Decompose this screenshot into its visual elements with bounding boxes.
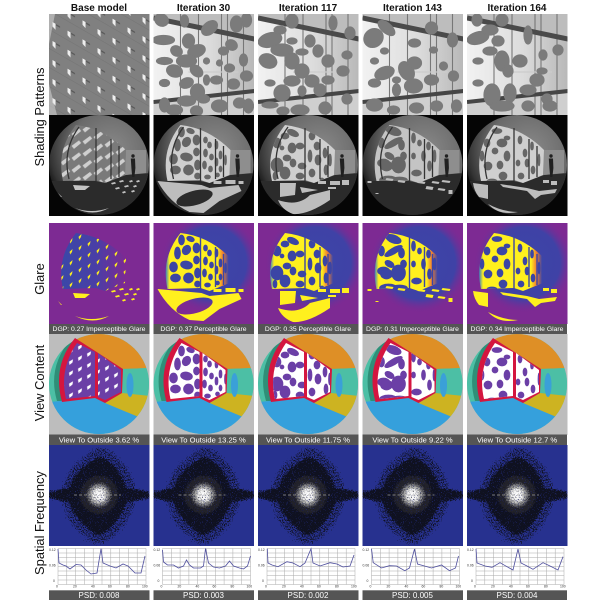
column heading: Iteration 164 <box>488 3 547 14</box>
power spectrum line chart: 0 <box>56 584 58 588</box>
power spectrum line chart: 0.06 <box>258 564 265 568</box>
power spectrum line chart: 40 <box>509 584 513 588</box>
glare caption: DGP: 0.34 Imperceptible Glare <box>471 326 564 333</box>
power spectrum line chart: 0.06 <box>362 564 369 568</box>
power spectrum line chart: 80 <box>544 584 548 588</box>
power spectrum line chart: 20 <box>386 584 390 588</box>
power spectrum line chart: 100 <box>351 584 357 588</box>
view content map <box>467 334 568 439</box>
row label: Glare: Glare <box>32 263 47 295</box>
power spectrum line chart: 20 <box>178 584 181 588</box>
power spectrum line chart: 80 <box>440 584 443 588</box>
spatial frequency spectrum <box>362 445 464 546</box>
power spectrum line chart: 0 <box>474 584 476 588</box>
PSD caption <box>49 590 150 600</box>
view caption <box>362 434 463 445</box>
power spectrum line chart: 0 <box>366 579 368 583</box>
view content map <box>49 334 150 439</box>
glare caption: DGP: 0.31 Imperceptible Glare <box>366 326 459 333</box>
column: Iteration 30 <box>152 3 260 600</box>
facade pattern photo <box>49 14 150 115</box>
power spectrum line chart: 100 <box>560 584 566 588</box>
view caption: View To Outside 12.7 % <box>477 436 557 444</box>
power spectrum line chart: 0.12 <box>258 548 265 552</box>
PSD caption: PSD: 0.002 <box>288 591 329 600</box>
power spectrum line chart: 0.06 <box>467 564 474 568</box>
fisheye interior render <box>154 115 254 216</box>
power spectrum line chart: 100 <box>246 584 252 588</box>
power spectrum line chart <box>362 548 461 588</box>
power spectrum line chart: 40 <box>404 584 408 588</box>
power spectrum line chart <box>49 548 148 588</box>
power spectrum line chart <box>154 548 252 588</box>
glare caption <box>154 324 254 334</box>
power spectrum line chart: 0 <box>160 584 162 588</box>
power spectrum line chart: 0.12 <box>467 548 474 552</box>
column heading: Iteration 143 <box>383 3 442 14</box>
view content map <box>258 334 359 439</box>
spatial frequency spectrum <box>154 445 254 546</box>
view content map <box>154 334 254 439</box>
power spectrum line chart: 40 <box>196 584 199 588</box>
view caption <box>467 434 567 445</box>
power spectrum line chart: 20 <box>282 584 286 588</box>
power spectrum line chart: 0.06 <box>49 564 56 568</box>
column: Iteration 143 <box>360 3 470 600</box>
power spectrum line chart: 100 <box>142 584 148 588</box>
view caption <box>49 434 150 445</box>
glare caption <box>362 324 463 334</box>
power spectrum line chart: 60 <box>526 584 530 588</box>
power spectrum line chart: 0 <box>265 584 267 588</box>
glare caption: DGP: 0.27 Imperceptible Glare <box>53 326 146 333</box>
facade pattern photo <box>466 14 568 115</box>
power spectrum line chart: 0.12 <box>154 548 160 552</box>
power spectrum line chart: 60 <box>108 584 112 588</box>
PSD caption: PSD: 0.003 <box>183 591 225 600</box>
power spectrum line chart: 0 <box>471 579 473 583</box>
power spectrum line chart: 100 <box>456 584 461 588</box>
glare caption: DGP: 0.37 Perceptible Glare <box>160 326 247 333</box>
column heading: Base model <box>71 3 127 14</box>
glare map <box>258 223 358 324</box>
power spectrum line chart: 0.06 <box>154 564 160 568</box>
fisheye interior render <box>362 115 464 216</box>
glare map <box>49 223 150 324</box>
PSD caption: PSD: 0.008 <box>79 591 120 600</box>
column heading: Iteration 30 <box>177 3 231 14</box>
glare map <box>362 223 463 324</box>
power spectrum line chart: 20 <box>491 584 495 588</box>
column: Base model <box>49 3 150 600</box>
fisheye interior render <box>467 115 568 216</box>
power spectrum line chart: 80 <box>126 584 130 588</box>
power spectrum line chart: 0 <box>370 584 372 588</box>
PSD caption <box>362 590 463 600</box>
power spectrum line chart: 40 <box>300 584 304 588</box>
power spectrum line chart: 60 <box>422 584 425 588</box>
row label: Spatial Frequency: Spatial Frequency <box>32 470 47 575</box>
power spectrum line chart: 80 <box>230 584 234 588</box>
power spectrum line chart: 60 <box>212 584 216 588</box>
row label: View Content: View Content <box>32 344 47 421</box>
glare map <box>467 223 568 324</box>
spatial frequency spectrum <box>258 445 359 546</box>
power spectrum line chart: 60 <box>317 584 321 588</box>
spatial frequency spectrum <box>467 445 568 546</box>
power spectrum line chart: 40 <box>91 584 95 588</box>
power spectrum line chart: 80 <box>335 584 339 588</box>
glare caption: DGP: 0.35 Perceptible Glare <box>265 326 351 333</box>
power spectrum line chart: 20 <box>73 584 77 588</box>
facade pattern photo <box>257 14 359 115</box>
PSD caption <box>258 590 358 600</box>
power spectrum line chart <box>467 548 566 588</box>
view content map <box>362 334 464 439</box>
column: Iteration 164 <box>466 3 574 600</box>
power spectrum line chart: 0.12 <box>362 548 369 552</box>
fisheye interior render <box>49 115 150 216</box>
PSD caption <box>154 590 254 600</box>
view caption: View To Outside 9.22 % <box>372 436 453 444</box>
power spectrum line chart: 0 <box>158 579 160 583</box>
glare caption <box>467 324 567 334</box>
glare caption <box>49 324 150 334</box>
facade pattern photo <box>152 11 254 116</box>
PSD caption: PSD: 0.004 <box>497 591 538 600</box>
glare caption <box>258 324 358 334</box>
facade pattern photo <box>360 14 464 115</box>
PSD caption: PSD: 0.005 <box>392 591 434 600</box>
glare map <box>154 223 254 324</box>
spatial frequency spectrum <box>49 445 150 546</box>
power spectrum line chart <box>258 548 357 588</box>
power spectrum line chart: 0.12 <box>49 548 56 552</box>
view caption: View To Outside 13.25 % <box>161 436 246 444</box>
view caption: View To Outside 3.62 % <box>59 436 139 444</box>
column heading: Iteration 117 <box>279 3 338 14</box>
power spectrum line chart: 0 <box>53 579 55 583</box>
power spectrum line chart: 0 <box>262 579 264 583</box>
view caption: View To Outside 11.75 % <box>266 436 350 444</box>
fisheye interior render <box>258 115 359 216</box>
column: Iteration 117 <box>257 3 365 600</box>
row label: Shading Patterns: Shading Patterns <box>32 68 47 166</box>
PSD caption <box>467 590 567 600</box>
